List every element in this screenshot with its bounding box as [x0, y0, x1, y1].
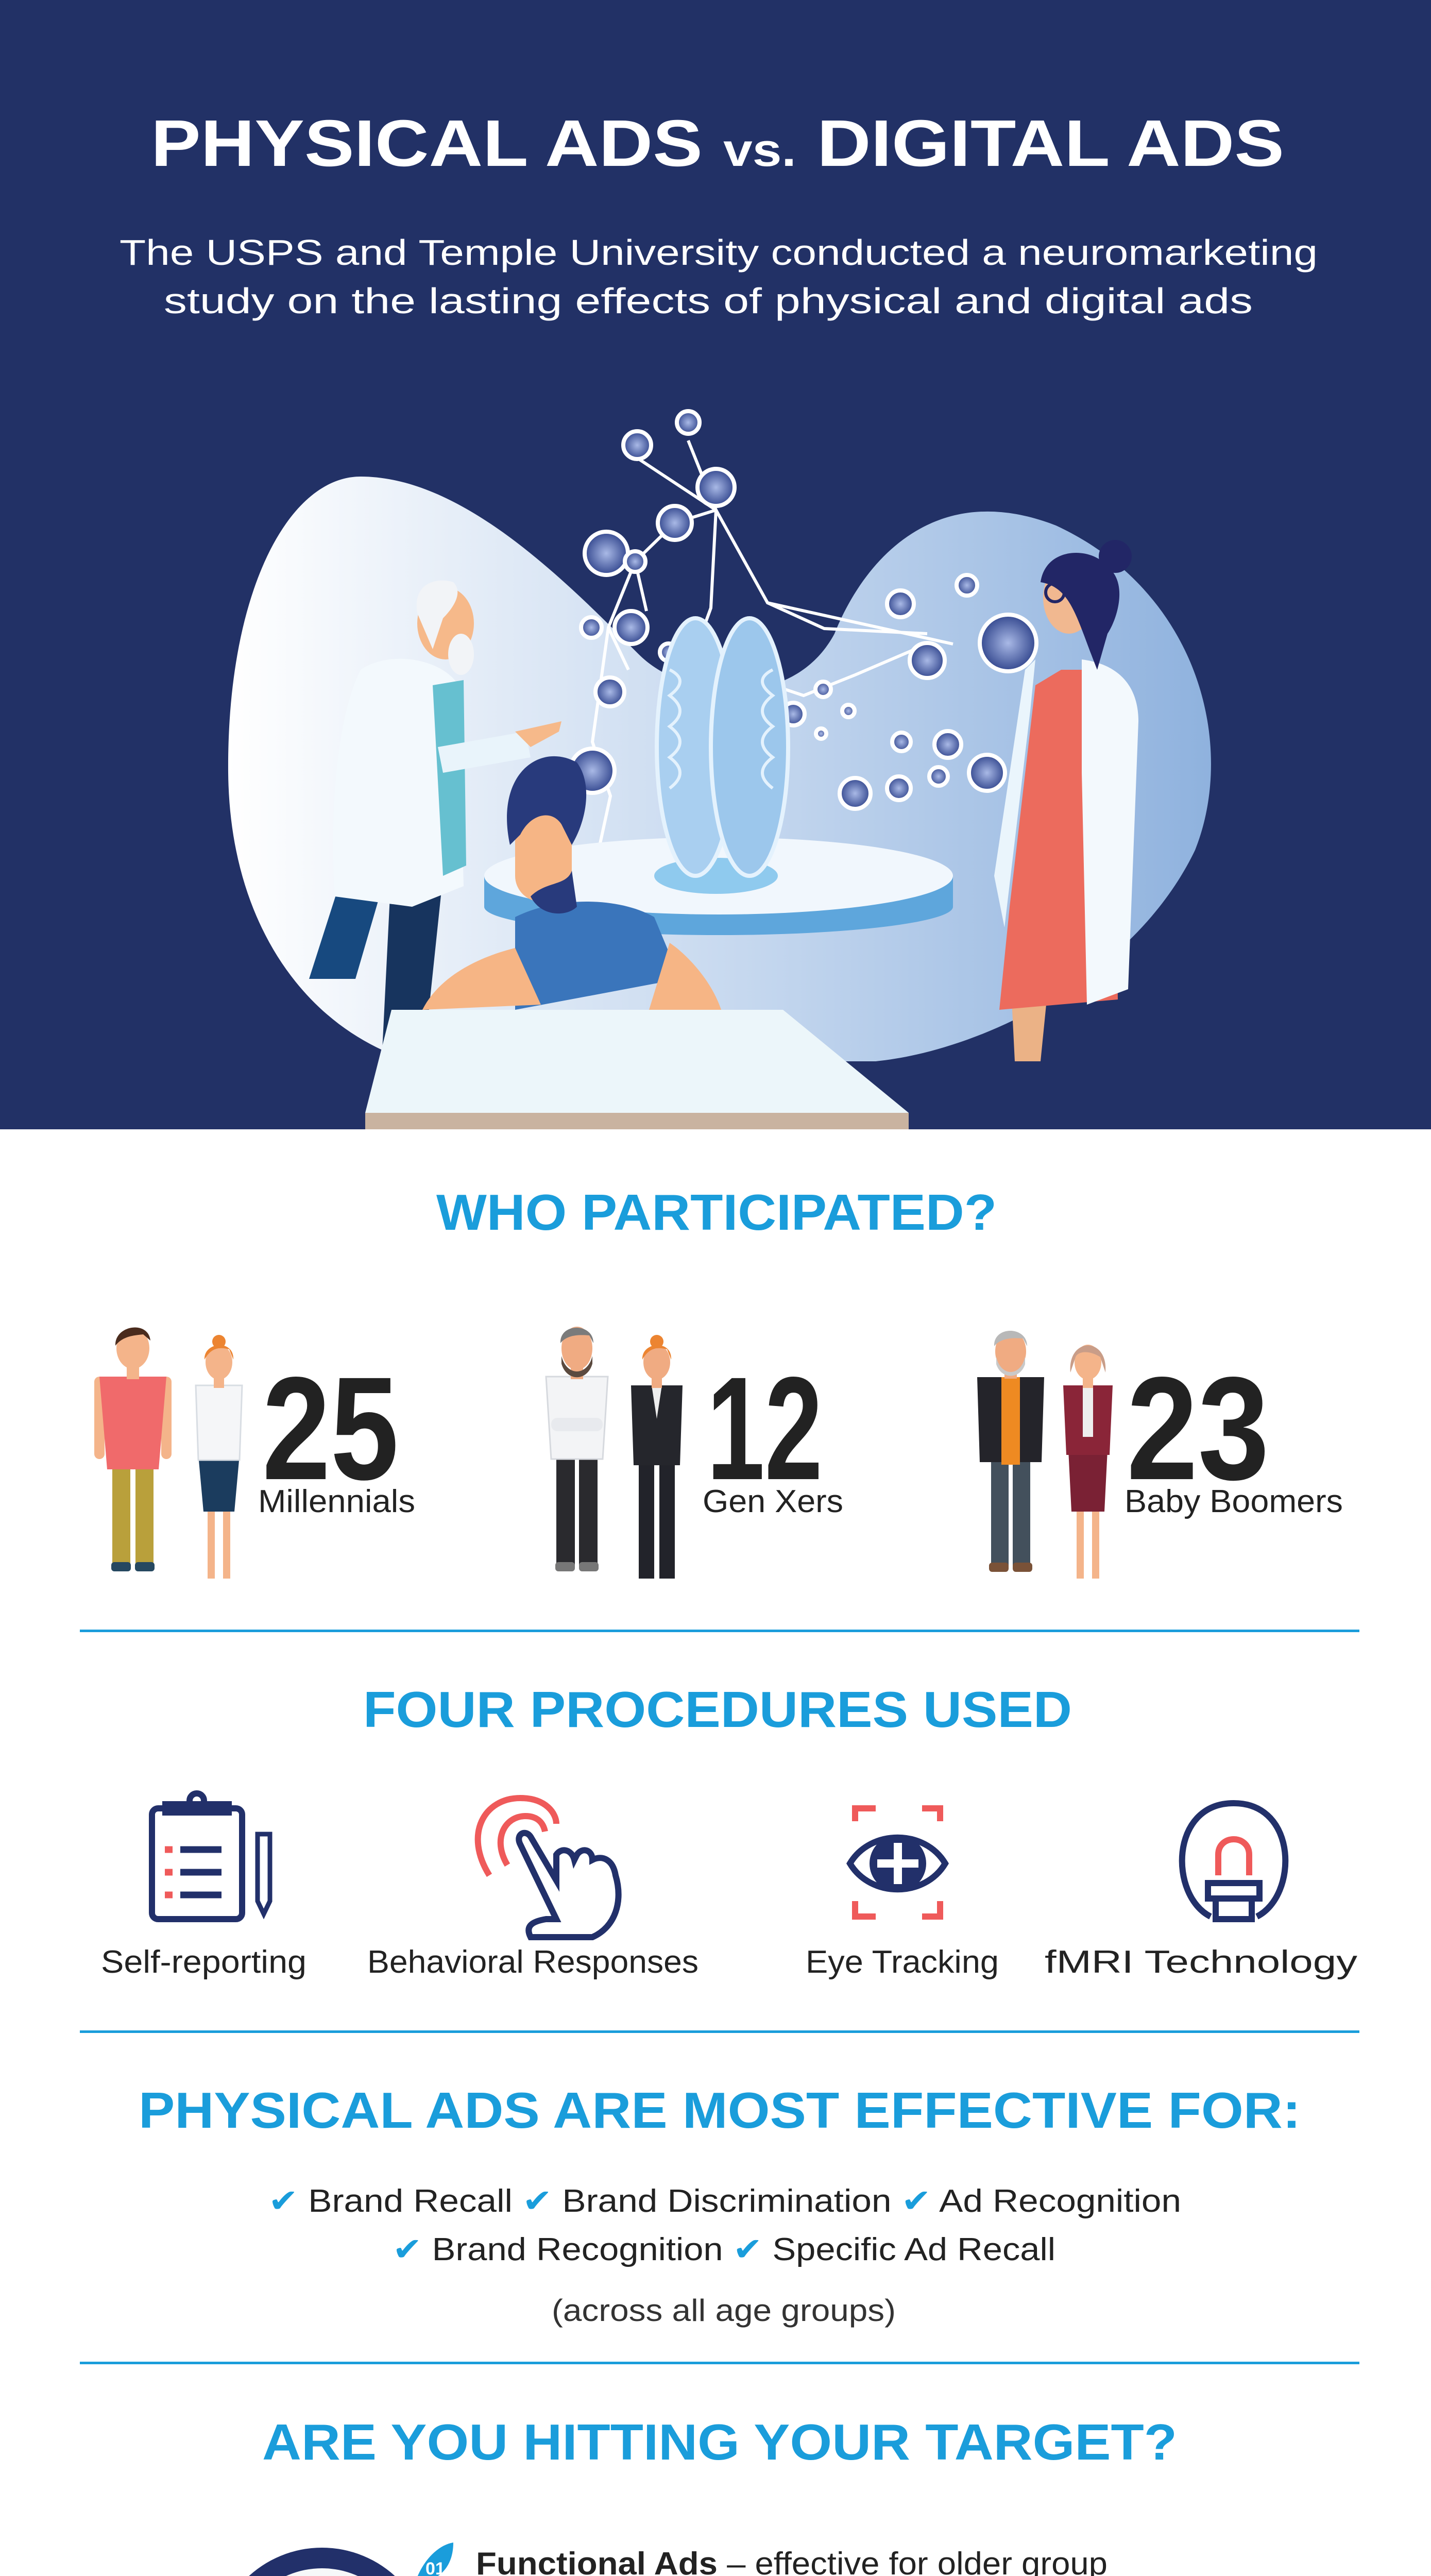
procedure: eye tracking: Eye Tracking	[806, 1944, 999, 1980]
stat: 25 millennials: 25	[262, 1347, 399, 1511]
procedure: self-reporting	[101, 1793, 306, 1980]
header background	[0, 0, 1431, 1129]
procedure: self-reporting: Self-reporting	[101, 1944, 306, 1980]
checklist: ✔ Brand Recognition ✔ Specific Ad Recall	[393, 2232, 1055, 2267]
subtitle: study on the lasting effects of physical and digital ads	[164, 281, 1253, 321]
heading: physical ads are most effective for: PHYSICAL ADS ARE MOST EFFECTIVE FOR:	[139, 2082, 1301, 2139]
icon: eye with brackets	[850, 1808, 945, 1917]
figures: millennials	[94, 1328, 242, 1579]
heading: are you hitting your target: ARE YOU HITTING YOUR TARGET?	[262, 2414, 1177, 2470]
procedure: behavioral responses: Behavioral Responses	[367, 1944, 699, 1980]
stat: 25 millennials: Millennials	[258, 1484, 415, 1519]
blob background	[228, 477, 1211, 1061]
heading: four procedures used: FOUR PROCEDURES USED	[363, 1681, 1072, 1738]
procedure: fMRI technology: fMRI Technology	[1045, 1944, 1357, 1980]
note: across all age groups: (across all age groups)	[552, 2293, 896, 2328]
illustration: scientists and brain	[228, 411, 1211, 1129]
brain pedestal	[484, 837, 953, 935]
procedure: behavioral responses	[367, 1798, 699, 1980]
subtitle: The USPS and Temple University conducted a neuromarketing	[120, 232, 1318, 273]
procedure: eye tracking	[806, 1808, 999, 1980]
stat: 12 gen xers: Gen Xers	[703, 1484, 843, 1519]
checklist	[268, 2183, 1181, 2267]
icon: mri scanner	[1182, 1803, 1285, 1919]
title: PHYSICAL ADS vs. DIGITAL ADS	[151, 107, 1284, 180]
figures: baby boomers	[977, 1331, 1113, 1579]
scientist: old man	[309, 581, 561, 1072]
stat: 12 gen xers: 12	[707, 1347, 823, 1511]
network nodes	[570, 411, 1036, 809]
stat: 23 baby boomers: Baby Boomers	[1125, 1484, 1343, 1519]
checklist: ✔ Brand Recall ✔ Brand Discrimination ✔ Ad Recognition	[268, 2183, 1181, 2219]
heading: who participated: WHO PARTICIPATED?	[436, 1184, 997, 1241]
procedure: fMRI technology	[1045, 1803, 1357, 1980]
stat: 23 baby boomers: 23	[1127, 1347, 1269, 1511]
person at laptop	[422, 756, 721, 1048]
figures: gen x	[546, 1327, 683, 1579]
icon: touch hand	[478, 1798, 619, 1937]
brain	[657, 618, 788, 876]
scientist: woman	[994, 540, 1138, 1061]
target chart	[214, 2543, 487, 2576]
desk	[365, 1010, 909, 1129]
icon: clipboard	[152, 1793, 270, 1919]
network lines	[592, 440, 953, 938]
marker 01	[415, 2543, 453, 2576]
subtitle	[120, 232, 1318, 321]
